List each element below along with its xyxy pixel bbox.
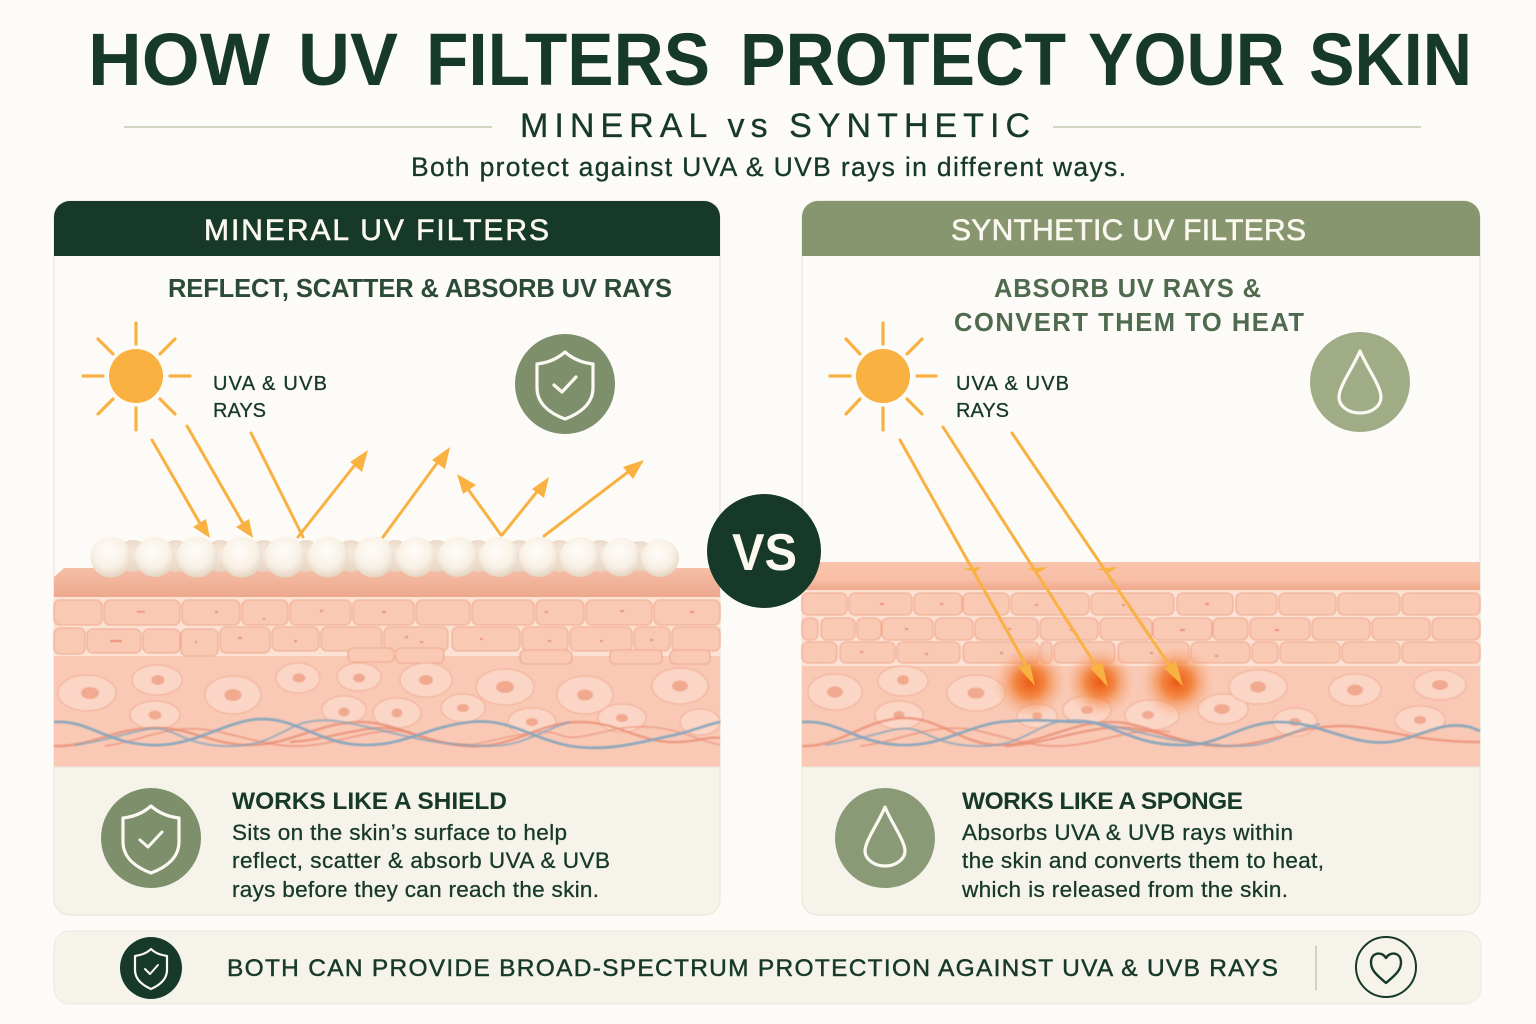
icon: sun <box>83 323 190 430</box>
panel header <box>54 201 720 256</box>
icon: shield <box>101 788 201 888</box>
skin base <box>54 597 720 767</box>
rays label <box>213 373 327 422</box>
shield description: reflect, scatter & absorb UVA & UVB <box>232 848 610 873</box>
shield description: Sits on the skin’s surface to help <box>232 820 567 845</box>
panel: mineral UV filters <box>54 201 720 915</box>
rays label: RAYS <box>213 400 266 422</box>
rays label: UVA & UVB <box>213 373 327 395</box>
icon: sun <box>830 323 936 430</box>
sponge description: Absorbs UVA & UVB rays within <box>962 820 1293 845</box>
icon: heart <box>1356 937 1416 997</box>
panel body <box>802 201 1480 915</box>
skin cross-section <box>54 536 720 767</box>
skin cell rows <box>54 600 720 664</box>
arrows: absorbed rays <box>900 427 1183 687</box>
rays label: UVA & UVB <box>956 373 1069 395</box>
heat glow <box>993 645 1214 719</box>
deep skin cells <box>58 663 720 736</box>
panel footer <box>802 767 1480 915</box>
panel heading: SYNTHETIC UV FILTERS <box>951 214 1306 247</box>
VS badge: VS <box>732 524 797 582</box>
title: FILTERS <box>426 18 710 101</box>
skin cell specks <box>860 603 1279 657</box>
bottom banner <box>54 931 1481 1004</box>
banner text: BOTH CAN PROVIDE BROAD-SPECTRUM PROTECTION AGAINST UVA & UVB RAYS <box>227 955 1278 982</box>
deep skin cells <box>808 666 1466 736</box>
mineral filter particles <box>90 536 679 578</box>
cell nuclei <box>827 675 1448 726</box>
icon: water drop <box>1310 332 1410 432</box>
deep skin layer <box>54 656 720 767</box>
rays label: RAYS <box>956 400 1009 422</box>
sponge description <box>961 788 1324 902</box>
skin cross-section <box>802 562 1480 767</box>
sponge description: WORKS LIKE A SPONGE <box>962 788 1243 815</box>
skin cell rows <box>802 593 1480 663</box>
shield description <box>232 788 610 902</box>
sponge description: the skin and converts them to heat, <box>962 848 1324 873</box>
arrows: reflected rays <box>152 426 644 538</box>
skin details <box>802 593 1480 746</box>
rays label <box>956 373 1069 422</box>
panel subheading: REFLECT, SCATTER & ABSORB UV RAYS <box>168 275 672 303</box>
panel subheading: ABSORB UV RAYS & <box>994 275 1261 303</box>
title: SKIN <box>1309 18 1472 101</box>
title <box>88 18 1472 101</box>
panel heading: MINERAL UV FILTERS <box>204 214 549 247</box>
skin top layer <box>54 568 720 597</box>
cell nuclei <box>81 674 688 726</box>
subtitle with rules: MINERAL vs SYNTHETIC <box>520 107 1030 145</box>
panel body <box>54 201 720 915</box>
title: UV <box>298 18 398 101</box>
icon: water drop <box>835 788 935 888</box>
skin top layer <box>802 562 1480 590</box>
title: PROTECT <box>740 18 1066 101</box>
blood vessels <box>802 718 1480 746</box>
panel subheading: CONVERT THEM TO HEAT <box>954 309 1304 337</box>
shield description: WORKS LIKE A SHIELD <box>232 788 507 815</box>
panel header <box>802 201 1480 256</box>
icon: shield <box>515 334 615 434</box>
banner background <box>54 931 1481 1004</box>
panel subheading <box>954 275 1304 337</box>
deep skin layer <box>802 666 1480 767</box>
blood vessels <box>54 719 720 748</box>
panel: synthetic UV filters <box>802 201 1480 915</box>
title: YOUR <box>1088 18 1285 101</box>
skin details <box>54 600 720 748</box>
VS badge <box>707 494 821 608</box>
intro text: Both protect against UVA & UVB rays in different ways. <box>411 152 1126 182</box>
panel footer <box>54 767 720 915</box>
skin cell specks <box>110 610 694 643</box>
shield description: rays before they can reach the skin. <box>232 877 599 902</box>
skin base <box>802 590 1480 767</box>
icon: shield badge <box>120 937 182 999</box>
title: HOW <box>88 18 270 101</box>
sponge description: which is released from the skin. <box>961 877 1288 902</box>
